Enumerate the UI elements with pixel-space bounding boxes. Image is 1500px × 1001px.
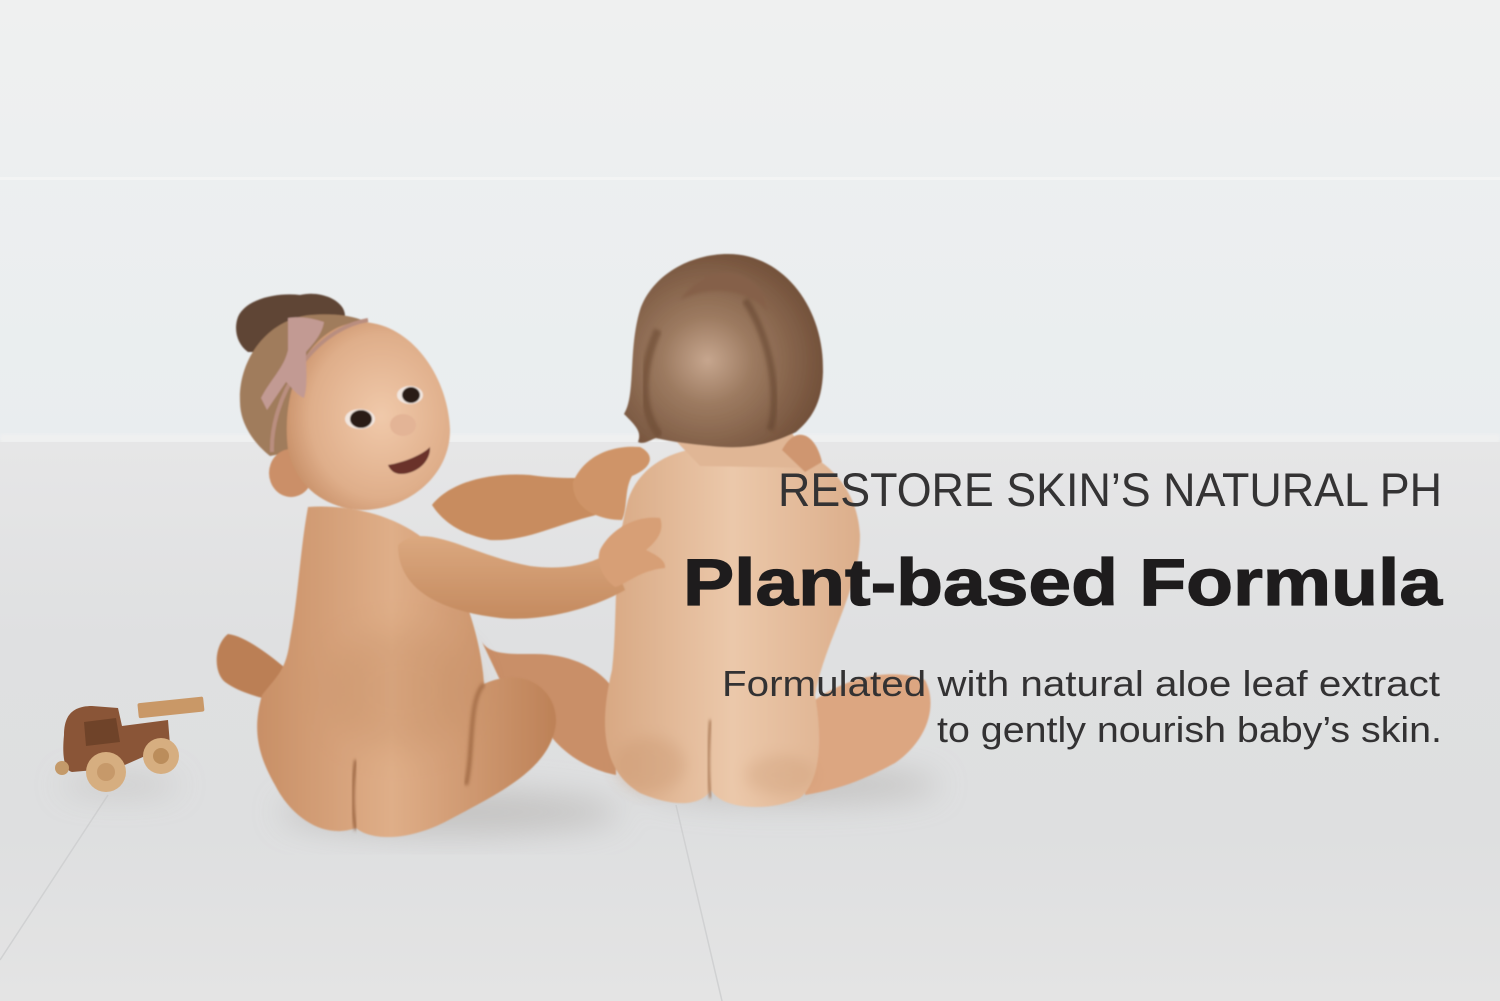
- illustration: right baby from behind: [482, 254, 931, 807]
- illustration: left baby: [217, 294, 665, 837]
- body text: to gently nourish baby’s skin.: [937, 709, 1442, 750]
- left baby nose: [390, 414, 416, 436]
- eyebrow heading: RESTORE SKIN’S NATURAL PH: [778, 463, 1442, 516]
- main heading: Plant-based Formula: [683, 545, 1444, 619]
- body text: Formulated with natural aloe leaf extract: [722, 663, 1440, 704]
- left baby back and bottom: [257, 507, 556, 837]
- right baby far thigh: [482, 642, 616, 775]
- right baby torso: [605, 448, 860, 807]
- right baby near leg: [805, 674, 931, 795]
- left baby curly hair: [236, 294, 345, 352]
- body text: [722, 663, 1442, 750]
- left baby mouth: [388, 447, 430, 474]
- left baby face: [287, 322, 450, 510]
- right baby neck and hidden hand: [675, 430, 815, 468]
- left baby front arm: [398, 536, 625, 619]
- left baby hands: [573, 447, 650, 520]
- left baby upper arm: [432, 474, 596, 540]
- left baby foot: [217, 634, 290, 702]
- left baby ear: [269, 449, 313, 497]
- left baby headband and bow: [272, 320, 368, 452]
- floor shadows: [60, 767, 940, 834]
- right baby hair: [624, 254, 823, 447]
- left baby eyes: [345, 386, 423, 429]
- icon: wooden toy truck: [55, 696, 205, 792]
